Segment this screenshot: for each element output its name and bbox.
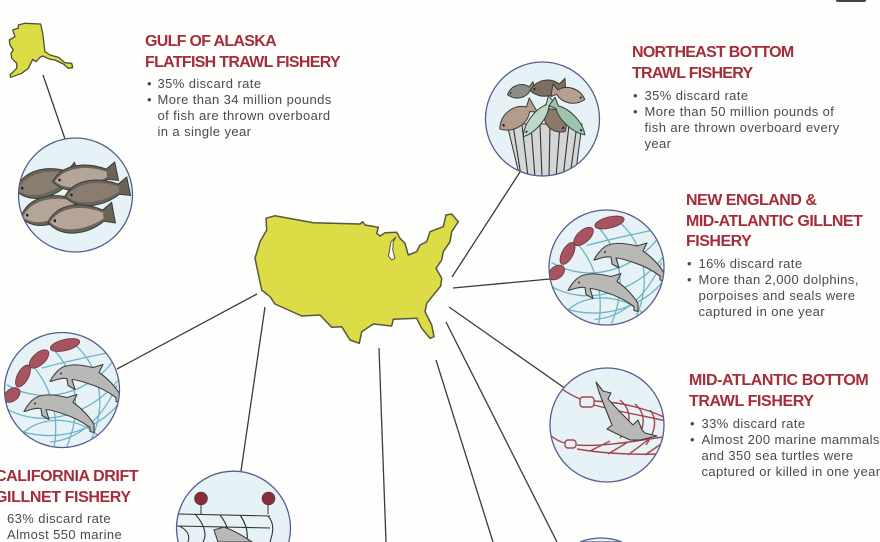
bullets: Gulf of Alaska: 35% discard rate	[158, 76, 261, 91]
bullets: Mid-Atlantic: and 350 sea turtles were	[702, 448, 853, 463]
icon circle: basket of fish	[486, 62, 600, 178]
bullets: Mid-Atlantic	[690, 416, 880, 479]
bullets: Mid-Atlantic: 33% discard rate	[702, 416, 805, 431]
heading: Gulf of Alaska	[145, 33, 340, 70]
bullets: Northeast: •	[633, 104, 638, 119]
bullets: Mid-Atlantic: •	[690, 416, 695, 431]
heading: New England: FISHERY	[686, 233, 751, 250]
bullets: Mid-Atlantic: Almost 200 marine mammals	[702, 432, 880, 447]
heading: Gulf of Alaska: GULF OF ALASKA	[145, 33, 276, 50]
bullets: Mid-Atlantic: •	[690, 432, 695, 447]
icon circle: dolphin in trawl net	[550, 368, 666, 482]
heading: Northeast: TRAWL FISHERY	[632, 64, 752, 82]
icon: Alaska map	[9, 23, 73, 77]
bullets: Northeast: •	[633, 88, 638, 103]
heading: Mid-Atlantic	[689, 372, 868, 410]
icon circle: flatfish	[12, 138, 132, 252]
bullets: New England: •	[687, 272, 692, 287]
heading: New England	[686, 192, 863, 250]
bullets: Mid-Atlantic: captured or killed in one year	[702, 464, 880, 479]
bullets: California: 63% discard rate	[7, 511, 111, 526]
icon circle: dolphins in gillnet, California	[1, 332, 120, 448]
text block: New England gillnet	[686, 192, 863, 319]
badge at top right edge	[836, 0, 866, 2]
bullets: Northeast	[633, 88, 840, 151]
heading: Mid-Atlantic: TRAWL FISHERY	[689, 392, 814, 410]
bullets: Gulf of Alaska: in a single year	[158, 124, 251, 139]
heading: California	[0, 468, 138, 506]
map: contiguous United States	[255, 214, 458, 343]
bullets: Northeast: fish are thrown overboard every	[644, 120, 840, 135]
bullets: Northeast: More than 50 million pounds of	[644, 104, 834, 119]
connector: New England gillnet	[453, 279, 550, 288]
connector: Northeast trawl	[452, 172, 520, 277]
heading: New England: NEW ENGLAND &	[686, 192, 816, 209]
bullets: Northeast: 35% discard rate	[644, 88, 748, 103]
bullets: Gulf of Alaska: of fish are thrown overboard	[158, 108, 331, 123]
bullets: Northeast: year	[644, 136, 671, 151]
connector: Mid-Atlantic trawl	[449, 307, 566, 389]
bullets: New England: captured in one year	[698, 304, 825, 319]
connector: lower center fishery	[379, 348, 386, 542]
connector: lower center-right fishery	[436, 360, 493, 542]
text block: California drift gillnet	[0, 468, 138, 542]
text block: Northeast bottom trawl	[632, 44, 840, 151]
bullets: New England: •	[687, 256, 692, 271]
bullets: California	[7, 511, 122, 542]
connector: Alaska to flatfish circle	[43, 75, 65, 139]
connector: California gillnet	[117, 294, 257, 369]
bullets: Gulf of Alaska	[147, 76, 332, 139]
icon circle: set net with buoys	[176, 471, 290, 542]
icon circle: dolphins in gillnet, New England	[546, 210, 664, 326]
bullets: Gulf of Alaska: More than 34 million pounds	[158, 92, 332, 107]
heading: Northeast	[632, 44, 794, 82]
bullets: New England	[687, 256, 859, 319]
text block: Gulf of Alaska	[145, 33, 340, 139]
bullets: New England: porpoises and seals were	[698, 288, 856, 303]
icon circle: lower right, barely visible	[580, 538, 622, 542]
bullets: New England: More than 2,000 dolphins,	[698, 272, 859, 287]
bullets: California: Almost 550 marine	[7, 527, 122, 542]
heading: Gulf of Alaska: FLATFISH TRAWL FISHERY	[145, 54, 340, 70]
bullets: Gulf of Alaska: •	[147, 76, 152, 91]
connector: lower left fishery	[241, 307, 265, 471]
heading: Mid-Atlantic: MID-ATLANTIC BOTTOM	[689, 372, 868, 389]
bullets: Gulf of Alaska: •	[147, 92, 152, 107]
heading: Northeast: NORTHEAST BOTTOM	[632, 44, 794, 61]
connector: lower right fishery	[446, 322, 557, 542]
heading: New England: MID-ATLANTIC GILLNET	[686, 212, 862, 230]
bullets: New England: 16% discard rate	[698, 256, 802, 271]
text block: Mid-Atlantic bottom trawl	[689, 372, 880, 479]
